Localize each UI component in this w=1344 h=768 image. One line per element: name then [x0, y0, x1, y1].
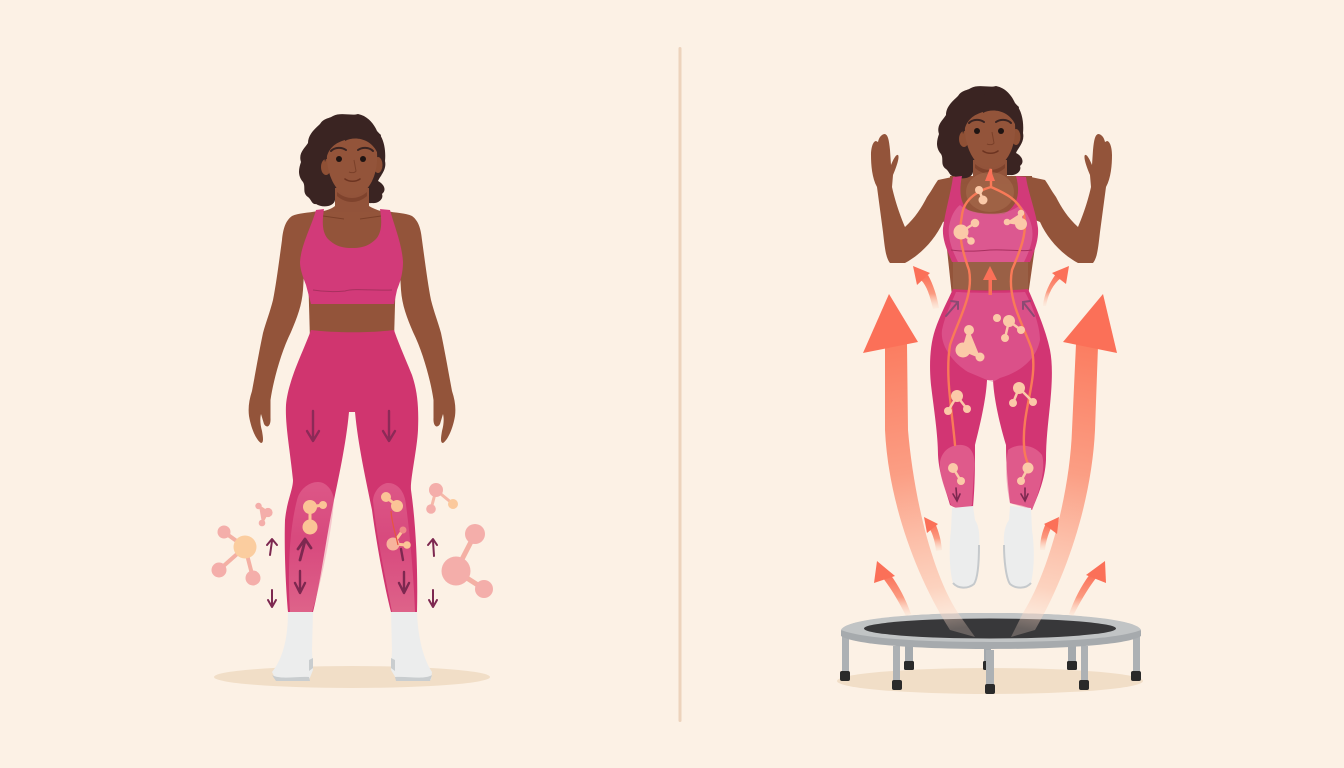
outer molecule left large [212, 526, 260, 586]
jumping knee highlights [940, 445, 1043, 510]
throat and waist arrows [983, 168, 997, 295]
jumping figure torso [946, 176, 1036, 296]
flow lines [948, 170, 1033, 470]
molecules inside knees [302, 492, 411, 550]
trampoline [840, 613, 1141, 694]
standing figure head [299, 114, 386, 212]
ground shadow: standing [214, 666, 490, 688]
thigh arrows [307, 411, 395, 441]
leggings [285, 330, 418, 612]
white socks [272, 612, 432, 680]
jumping foot soles [953, 545, 1031, 588]
molecules in jumping body [944, 186, 1037, 485]
jumping leggings [930, 289, 1052, 510]
tank top light overlay [949, 205, 1032, 262]
collarbone lines [323, 216, 381, 219]
outer small arrows [267, 539, 437, 607]
standing figure arms and shoulders [249, 211, 455, 443]
bra seam [313, 290, 392, 292]
knee dark arrows [953, 488, 1028, 501]
sports bra [300, 209, 403, 304]
rim [841, 613, 1141, 649]
big lift arrow left [863, 294, 975, 637]
back legs [904, 644, 1077, 670]
trampoline shadow [837, 668, 1143, 694]
neck glow [966, 172, 1014, 212]
front legs [840, 636, 1141, 694]
outer molecule right large [442, 524, 493, 598]
center divider [678, 47, 682, 722]
tank seam [951, 250, 1032, 251]
panel: rebounding figure [837, 86, 1143, 694]
tank top [943, 176, 1038, 262]
standing figure torso [308, 211, 396, 340]
jumping figure head [937, 86, 1024, 184]
hip light overlay [942, 292, 1040, 382]
knee and calf highlights [289, 482, 415, 612]
jumping figure arms and raised hands [871, 134, 1112, 263]
hip dark arrows [946, 301, 1034, 316]
jump mat [864, 618, 1116, 638]
calf arrows [295, 539, 409, 593]
big lift arrow right [1011, 294, 1117, 637]
sock soles [272, 658, 432, 681]
small lift arrows [874, 266, 1106, 616]
vein in right knee [391, 511, 398, 545]
panel: standing figure [212, 114, 493, 688]
outer molecule right small [426, 483, 458, 514]
midriff shading [953, 262, 1028, 290]
jumping feet [950, 506, 1034, 588]
outer molecule left small [255, 503, 273, 526]
